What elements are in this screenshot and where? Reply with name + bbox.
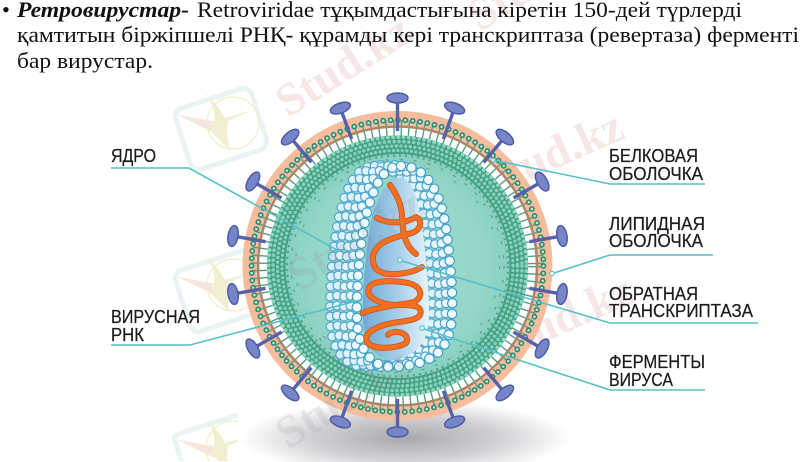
spikes: surface glycoproteins [226,93,569,437]
label: reverse transcriptase [609,283,754,321]
label: viral RNA [111,306,200,345]
capsid front row [357,166,452,367]
logo: top [173,86,269,172]
label: viral enzymes: ВИРУСА [609,369,674,390]
line 3: бар вирустар. [17,48,153,73]
virus particle [226,93,569,437]
outer peach membrane [242,111,552,421]
label: protein shell: ОБОЛОЧКА [609,163,704,184]
label: viral enzymes [609,351,705,390]
leader: reverse transcriptase [398,258,758,323]
watermark text behind virus: Stud.kz [473,100,631,207]
capsid back rows [330,166,425,367]
label: viral RNA: ВИРУСНАЯ [111,306,200,327]
label: lipid envelope: ЛИПИДНАЯ [609,213,705,234]
header paragraph [2,0,799,73]
capsid row 3 [344,166,439,367]
label: protein shell [609,145,704,184]
watermark text over virus: Stud.kz [266,336,420,458]
watermark logos [173,86,269,461]
nucleus interior [363,178,429,360]
inner teal matrix [286,154,510,378]
line 2: қамтитын біржіпшелі РНҚ- құрамды кері транскриптаза (ревертаза) ферменті [17,22,799,47]
green protein shell [268,137,526,395]
label: lipid envelope [609,213,705,251]
leader: lipid envelope [550,255,713,276]
watermark text over virus [266,178,432,458]
viral RNA strand [363,185,422,348]
lipid bilayer [252,120,544,412]
leader: nucleus [111,168,337,250]
labels [111,145,754,390]
watermark text behind virus: Stud.kz [266,4,420,126]
leader: viral RNA [111,300,360,345]
logo: middle [173,248,269,334]
label: nucleus: ЯДРО [111,145,156,166]
label: reverse transcriptase: ОБРАТНАЯ [609,283,698,304]
capsid row 2 [337,165,432,366]
label: viral enzymes: ФЕРМЕНТЫ [609,351,705,372]
capsid row 4 [350,165,446,366]
watermark text over virus: Stud.kz [278,178,432,300]
leader: protein shell [491,158,705,184]
ground shadow [238,398,572,462]
label: viral RNA: РНК [111,324,144,345]
label: reverse transcriptase: ТРАНСКРИПТАЗА [609,300,754,321]
logo: bottom [174,412,265,461]
matrix speckle [287,156,508,376]
leader: viral enzymes [420,326,705,390]
leader lines [111,158,758,390]
label: lipid envelope: ОБОЛОЧКА [609,230,704,251]
nucleus capsid [330,165,452,367]
watermark text behind virus: Stud.kz [483,264,641,371]
label: protein shell: БЕЛКОВАЯ [609,145,698,166]
watermark text behind virus [266,0,641,371]
